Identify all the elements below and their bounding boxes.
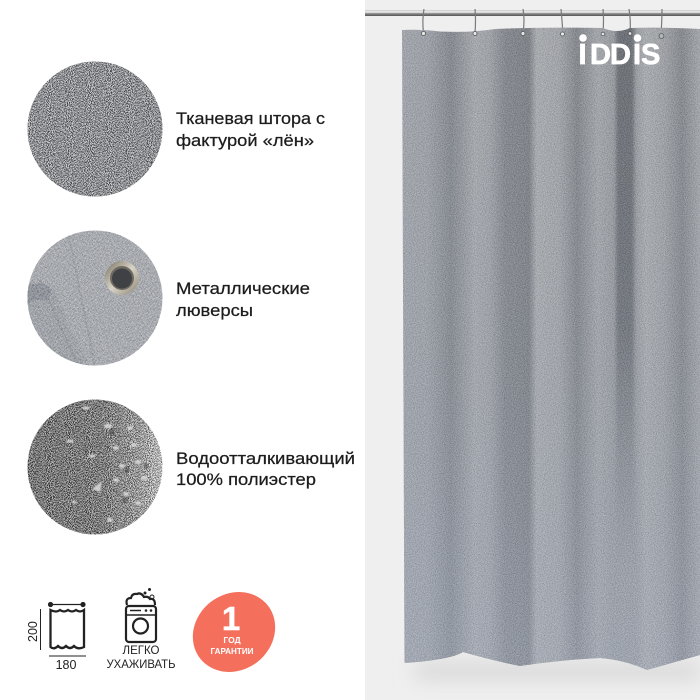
icon: washing machine	[126, 588, 156, 642]
shower curtain	[400, 25, 700, 675]
text: water-repellent polyester	[176, 449, 355, 489]
shadow under curtain	[415, 664, 700, 678]
text: metal grommets: Металлические	[176, 279, 310, 298]
text: linen fabric	[176, 109, 326, 150]
text: metal grommets	[176, 279, 310, 320]
badge: 1 year warranty	[177, 576, 291, 688]
icon: curtain dimensions	[26, 602, 86, 672]
text: linen fabric: фактурой «лён»	[176, 131, 314, 150]
label: easy care	[106, 645, 176, 671]
text: linen fabric: Тканевая штора с	[176, 109, 326, 128]
badge: 1 year warranty: 1	[222, 600, 240, 637]
badge: 1 year warranty: ГАРАНТИИ	[210, 646, 254, 656]
icon: curtain dimensions: 200	[26, 621, 40, 642]
badge: 1 year warranty: ГОД	[223, 635, 241, 645]
icon: curtain dimensions: 180	[56, 658, 76, 672]
label: easy care: УХАЖИВАТЬ	[106, 659, 176, 671]
text: water-repellent polyester: Водоотталкивающий	[176, 449, 355, 468]
text: metal grommets: люверсы	[176, 301, 253, 320]
eyelets	[422, 32, 664, 38]
label: easy care: ЛЕГКО	[123, 645, 160, 657]
swatch: metal grommet	[27, 230, 163, 366]
curtain rings	[423, 9, 662, 34]
swatch: linen texture	[27, 61, 163, 197]
curtain rod	[365, 10, 700, 16]
logo: IDDIS: IDDIS	[578, 39, 660, 71]
text: water-repellent polyester: 100% полиэстер	[176, 470, 316, 489]
swatch: water-repellent fabric	[27, 399, 163, 535]
